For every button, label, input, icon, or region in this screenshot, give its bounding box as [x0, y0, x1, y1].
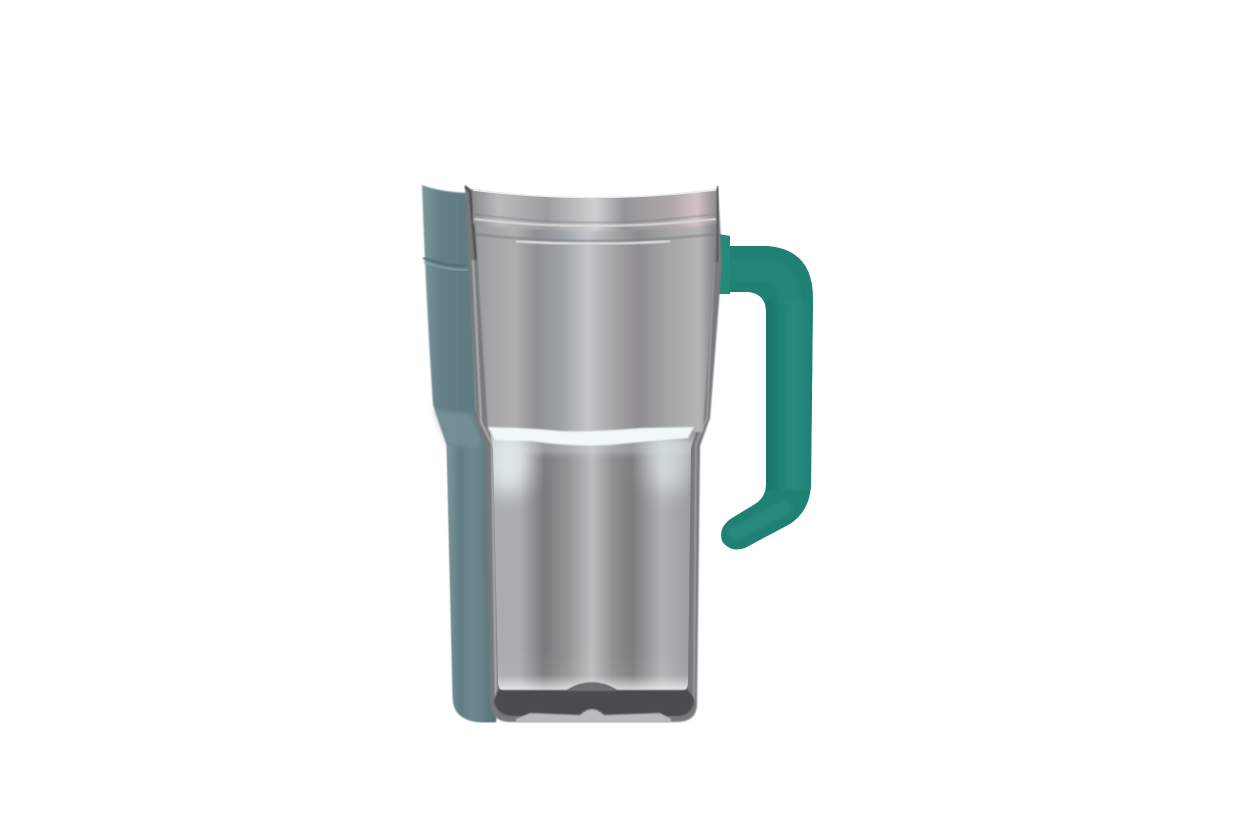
illustration: tumbler cross-section	[421, 184, 813, 724]
inner cup: lower silver	[486, 428, 698, 695]
handle	[718, 234, 813, 549]
steel wall cross-section	[465, 186, 722, 722]
base of the cup	[488, 682, 694, 722]
bright shoulder highlight	[488, 427, 694, 446]
inner cup: upper silver	[473, 190, 716, 432]
outer teal sleeve	[422, 185, 496, 722]
